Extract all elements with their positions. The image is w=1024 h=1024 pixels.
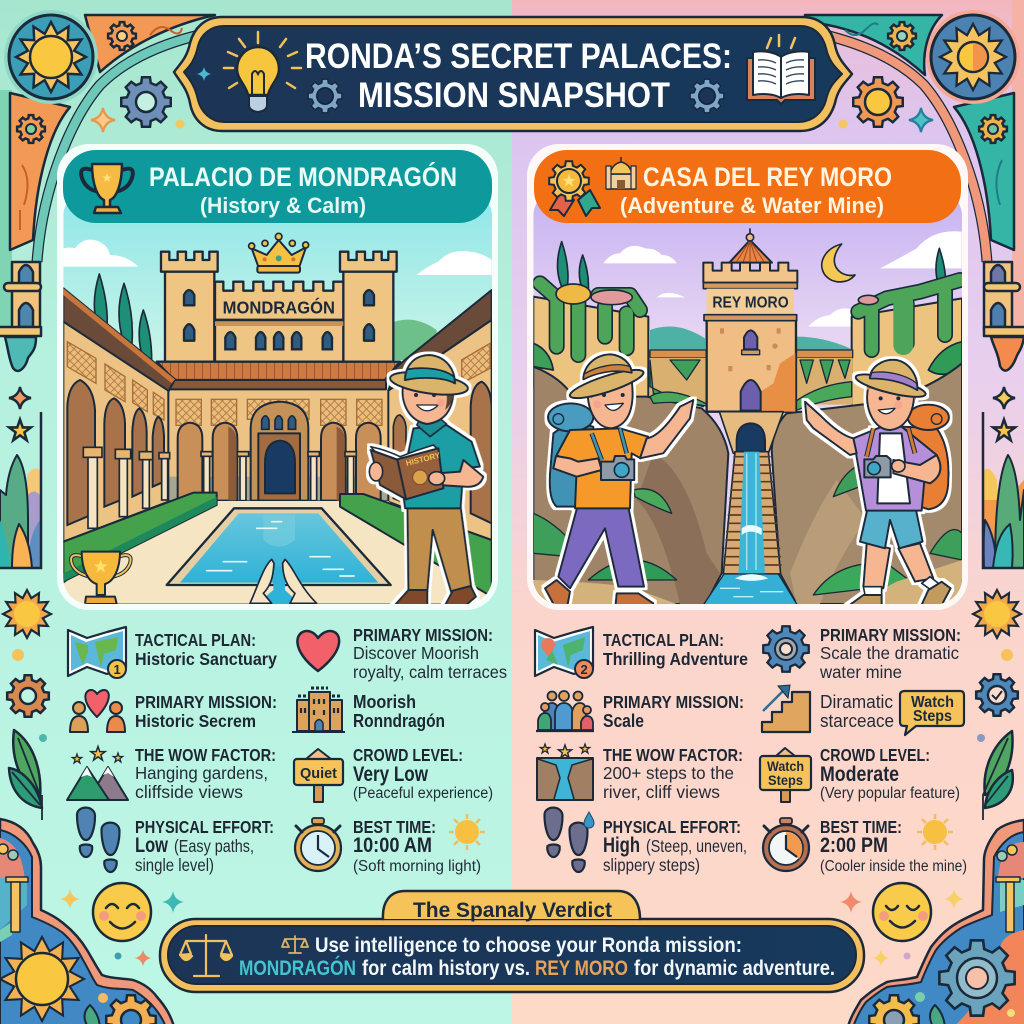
icon: map 1: 1	[114, 662, 121, 677]
crowd level text: (Very popular feature)	[820, 785, 960, 802]
explorer with orange backpack	[805, 360, 951, 613]
icon: map 2	[535, 627, 593, 678]
icon: Quiet sign	[294, 749, 343, 802]
crowd level text: CROWD LEVEL:	[820, 745, 930, 765]
sign: REY MORO: REY MORO	[712, 294, 789, 311]
moorish text	[353, 692, 445, 731]
icon: couple and heart	[70, 690, 125, 732]
primary mission text	[135, 692, 277, 731]
right plant box	[983, 412, 1024, 568]
canyon shading and shrubs	[533, 382, 962, 604]
physical effort text: slippery steps)	[603, 855, 700, 875]
physical effort text: High	[603, 834, 640, 857]
tactical plan text	[603, 630, 748, 669]
arms	[805, 402, 857, 455]
tactical plan text: Historic Sanctuary	[135, 649, 277, 669]
explorer right arm	[437, 460, 483, 487]
backpack	[550, 424, 597, 507]
physical effort text	[135, 817, 274, 875]
heading: Casa del Rey Moro	[534, 150, 961, 223]
icon: light bulb	[224, 32, 301, 112]
verdict inner bar	[168, 926, 856, 984]
icon: mosque	[606, 157, 636, 189]
dramatic text: Diramatic	[820, 692, 893, 712]
discover text: Discover Moorish	[353, 643, 479, 663]
top-right teal spandrel	[805, 15, 942, 75]
top-left orange spandrel	[85, 15, 215, 72]
title line 1: RONDA’S SECRET PALACES:	[305, 37, 732, 76]
scene: Rey Moro gorge	[533, 190, 962, 613]
wow factor text: THE WOW FACTOR:	[135, 745, 276, 765]
scale mission text: Scale the dramatic	[820, 643, 959, 663]
physical effort text: Low	[135, 834, 169, 857]
icon: rosette	[549, 161, 600, 216]
item: tactical plan	[535, 627, 748, 678]
item: best time	[295, 814, 485, 875]
verdict line 1: Use intelligence to choose your Ronda mission:	[315, 934, 742, 957]
icon: Watch Steps sign: Steps	[768, 772, 803, 788]
wow factor text: Hanging gardens,	[135, 763, 268, 783]
title line 2: MISSION SNAPSHOT	[358, 76, 670, 115]
icon: footprints and drop	[544, 808, 594, 872]
heading: Palacio de Mondragón	[63, 150, 492, 223]
dot	[12, 649, 24, 661]
best time text: 2:00 PM	[820, 834, 888, 857]
title banner	[174, 17, 852, 131]
tactical plan text: TACTICAL PLAN:	[135, 630, 256, 650]
speech bubble: Watch Steps: Steps	[913, 708, 952, 725]
left side sparkle and star	[9, 387, 31, 440]
wow factor text: cliffside views	[135, 782, 243, 802]
item: wow factor	[537, 744, 743, 802]
left plant box	[0, 412, 41, 568]
icon: Watch Steps sign: Watch	[767, 758, 804, 774]
icon: Watch Steps sign	[760, 748, 811, 802]
icon: leaves	[983, 731, 1013, 820]
discover text: PRIMARY MISSION:	[353, 625, 493, 645]
head	[867, 385, 914, 430]
item: crowd level	[760, 745, 960, 802]
icon: open book	[747, 35, 815, 104]
icon: gear right of title	[690, 79, 724, 113]
item: crowd level	[294, 745, 493, 802]
panel: Casa del Rey Moro	[527, 144, 968, 613]
physical effort text	[603, 817, 747, 875]
subheading text: (Adventure & Water Mine)	[620, 193, 884, 218]
dramatic text: starceace	[820, 711, 894, 731]
tunnel and stairs	[719, 412, 783, 575]
verdict tab: The Spanaly Verdict	[413, 899, 612, 922]
scale mission text	[819, 625, 961, 682]
explorer hat	[389, 368, 469, 399]
verdict line 2	[239, 956, 835, 980]
dramatic text	[820, 692, 894, 731]
bottom decorations	[60, 883, 964, 966]
dot	[39, 734, 47, 742]
icon: happy smiley	[93, 883, 151, 941]
right canyon rock	[772, 363, 962, 604]
crowd level text	[820, 745, 960, 802]
moorish text: Moorish	[353, 692, 416, 712]
left orange spandrel	[10, 93, 70, 250]
icon: Quiet sign: Quiet	[300, 765, 337, 782]
verdict tab	[383, 891, 640, 922]
wow factor text: river, cliff views	[603, 782, 720, 802]
tactical plan text: Thrilling Adventure	[603, 649, 748, 669]
physical effort text: PHYSICAL EFFORT:	[603, 817, 741, 837]
courtyard floor	[63, 501, 492, 604]
tactical plan text	[135, 630, 277, 669]
tactical plan text: TACTICAL PLAN:	[603, 630, 724, 650]
verdict bar	[160, 919, 864, 992]
verdict line 2: MONDRAGÓN	[239, 956, 356, 980]
right gallery	[388, 290, 492, 542]
explorer with book	[369, 355, 483, 612]
left tower	[161, 252, 218, 363]
left canyon rock	[533, 367, 728, 604]
right hedge	[340, 494, 492, 597]
vest	[853, 427, 937, 511]
best time text	[353, 817, 481, 875]
hat	[854, 370, 927, 401]
best time text: (Cooler inside the mine)	[820, 858, 967, 875]
shirt	[557, 428, 648, 508]
icon: gear left of title	[308, 79, 342, 113]
bottom-right corner ornament	[847, 820, 1024, 1024]
icon: orange gear	[7, 675, 49, 717]
icon: calm smiley	[873, 883, 931, 941]
left hedge shade	[63, 497, 217, 582]
shorts	[860, 505, 923, 548]
left foliage	[533, 283, 640, 370]
right cliff top	[850, 297, 962, 405]
heading text: PALACIO DE MONDRAGÓN	[149, 161, 457, 192]
icon: stairs with arrow	[762, 685, 810, 732]
backpack	[903, 427, 949, 509]
verdict line 2: for dynamic adventure.	[634, 957, 835, 980]
legs	[558, 507, 644, 588]
info grid: Rey Moro	[535, 625, 967, 875]
icon: sun badge	[973, 590, 1021, 638]
icon: sun	[917, 814, 953, 850]
explorer with book: HISTORY	[405, 451, 442, 468]
best time text: (Soft morning light)	[353, 858, 481, 875]
icon: scene trophy	[71, 552, 131, 604]
icon: stopwatch	[295, 818, 341, 871]
icon: small balance scales	[282, 936, 308, 953]
dot	[1001, 649, 1013, 661]
item: primary mission	[536, 691, 744, 731]
primary mission text: PRIMARY MISSION:	[603, 692, 744, 712]
sign: MONDRAGÓN: MONDRAGÓN	[223, 296, 335, 317]
right side sparkle and star	[993, 387, 1015, 440]
moorish text: Ronndragón	[353, 711, 445, 731]
discover text	[353, 625, 507, 682]
scene: Mondragón courtyard	[63, 190, 492, 612]
top-left sun medallion	[4, 10, 98, 104]
panel white border	[57, 144, 498, 610]
icon: balance scales	[180, 935, 232, 976]
boots	[545, 580, 653, 610]
dot	[176, 120, 184, 128]
primary mission text: PRIMARY MISSION:	[135, 692, 277, 712]
icon: sun	[449, 814, 485, 850]
speech bubble: Watch Steps	[900, 691, 964, 735]
icon: steel gear	[121, 77, 171, 127]
explorer shirt	[402, 425, 480, 508]
icon: group of people	[536, 691, 594, 731]
river pool	[703, 574, 797, 605]
icon: map 1	[68, 627, 126, 678]
top decorations	[91, 77, 933, 132]
panel: Palacio de Mondragón	[57, 144, 498, 612]
speech bubble: Watch Steps: Watch	[911, 694, 954, 711]
wow factor text	[135, 745, 276, 802]
item: dramatic staircase	[762, 685, 964, 735]
sparkle	[197, 67, 211, 81]
dot	[838, 120, 848, 128]
item: scale mission	[763, 625, 961, 682]
hat	[567, 364, 646, 404]
left teal arch band	[37, 36, 195, 262]
icon: blue gear	[763, 626, 809, 672]
item: wow factor	[67, 745, 276, 802]
top-right sun medallion	[926, 10, 1020, 104]
physical effort text: (Easy paths,	[174, 836, 254, 856]
icon: teal sparkle	[909, 108, 933, 132]
right tower	[340, 252, 397, 363]
side decorations left	[3, 590, 51, 820]
icon: leaves	[9, 730, 42, 820]
wow factor text: THE WOW FACTOR:	[603, 745, 743, 765]
verdict banner	[160, 891, 864, 992]
scale mission text: PRIMARY MISSION:	[820, 625, 961, 645]
discover text: royalty, calm terraces	[353, 662, 507, 682]
left gallery	[63, 288, 175, 542]
sparkles and dots	[60, 889, 964, 966]
scale mission text: water mine	[819, 662, 902, 682]
physical effort text: single level)	[135, 855, 214, 875]
crowd level text: Very Low	[353, 763, 429, 786]
right teal spandrel	[954, 93, 1014, 250]
icon: heart	[297, 631, 339, 671]
crowd level text: CROWD LEVEL:	[353, 745, 463, 765]
fountain	[250, 559, 317, 604]
explorer legs	[407, 507, 472, 594]
info grid: Mondragón	[67, 625, 507, 875]
panel white border	[527, 144, 968, 610]
icon: orange sun gear	[853, 77, 903, 127]
best time text	[820, 817, 967, 875]
best time text: BEST TIME:	[820, 817, 902, 837]
bottom-left corner ornament	[0, 819, 175, 1024]
right foliage	[858, 280, 962, 374]
icon: canyon waterfall and stars	[537, 744, 593, 800]
item: tactical plan	[68, 627, 277, 678]
wow factor text	[603, 745, 743, 802]
tower	[703, 228, 797, 412]
bridge walls	[650, 350, 853, 407]
icon: castle	[292, 688, 345, 732]
icon: stopwatch	[763, 818, 809, 871]
crowd level text: Moderate	[820, 763, 899, 786]
main hall and back wall	[157, 362, 400, 502]
verdict line 2: REY MORO	[535, 957, 628, 980]
icon: footprints	[77, 808, 120, 872]
best time text: BEST TIME:	[353, 817, 436, 837]
item: best time	[763, 814, 967, 875]
icon: mountains and stars	[67, 746, 128, 800]
explorer head	[403, 383, 454, 424]
primary mission text: Scale	[603, 711, 644, 731]
crowd level text: (Peaceful experience)	[353, 785, 493, 802]
explorer book	[367, 443, 438, 458]
icon: blue check gear	[976, 674, 1018, 716]
legs	[863, 543, 933, 588]
left hedge	[63, 493, 217, 582]
camera	[601, 456, 634, 480]
item: moorish	[292, 688, 445, 732]
boots	[845, 582, 951, 613]
verdict line 2: for calm history vs.	[362, 957, 530, 980]
left lantern column	[0, 262, 41, 371]
central wall	[215, 282, 343, 363]
physical effort text: (Steep, uneven,	[646, 836, 747, 856]
primary mission text	[603, 692, 744, 731]
shirt	[877, 433, 910, 503]
item: physical effort	[77, 808, 274, 875]
physical effort text: PHYSICAL EFFORT:	[135, 817, 274, 837]
icon: sun badge	[3, 590, 51, 638]
icon: gold trophy	[81, 164, 133, 213]
crowd level text	[353, 745, 493, 802]
heading text: CASA DEL REY MORO	[643, 162, 892, 192]
subheading text: (History & Calm)	[200, 193, 366, 218]
side decorations right	[973, 590, 1021, 820]
explorer with blue backpack	[545, 354, 693, 610]
wow factor text: 200+ steps to the	[603, 763, 734, 783]
right lantern column	[984, 262, 1024, 371]
arms	[640, 400, 693, 458]
head	[588, 380, 633, 428]
icon: map 2: 2	[580, 662, 588, 677]
dot	[977, 734, 985, 742]
item: primary mission	[70, 690, 277, 732]
icon: crown	[249, 233, 309, 273]
item: discover	[297, 625, 507, 682]
best time text: 10:00 AM	[353, 834, 432, 857]
icon: orange sparkle	[91, 108, 115, 132]
left cliff top	[533, 296, 650, 396]
right salmon arch band	[829, 36, 987, 262]
primary mission text: Historic Secrem	[135, 711, 256, 731]
explorer boots	[390, 584, 480, 604]
icon: crescent moon	[822, 244, 855, 282]
item: physical effort	[544, 808, 747, 875]
reflecting pool	[167, 508, 391, 585]
camera	[864, 456, 891, 477]
